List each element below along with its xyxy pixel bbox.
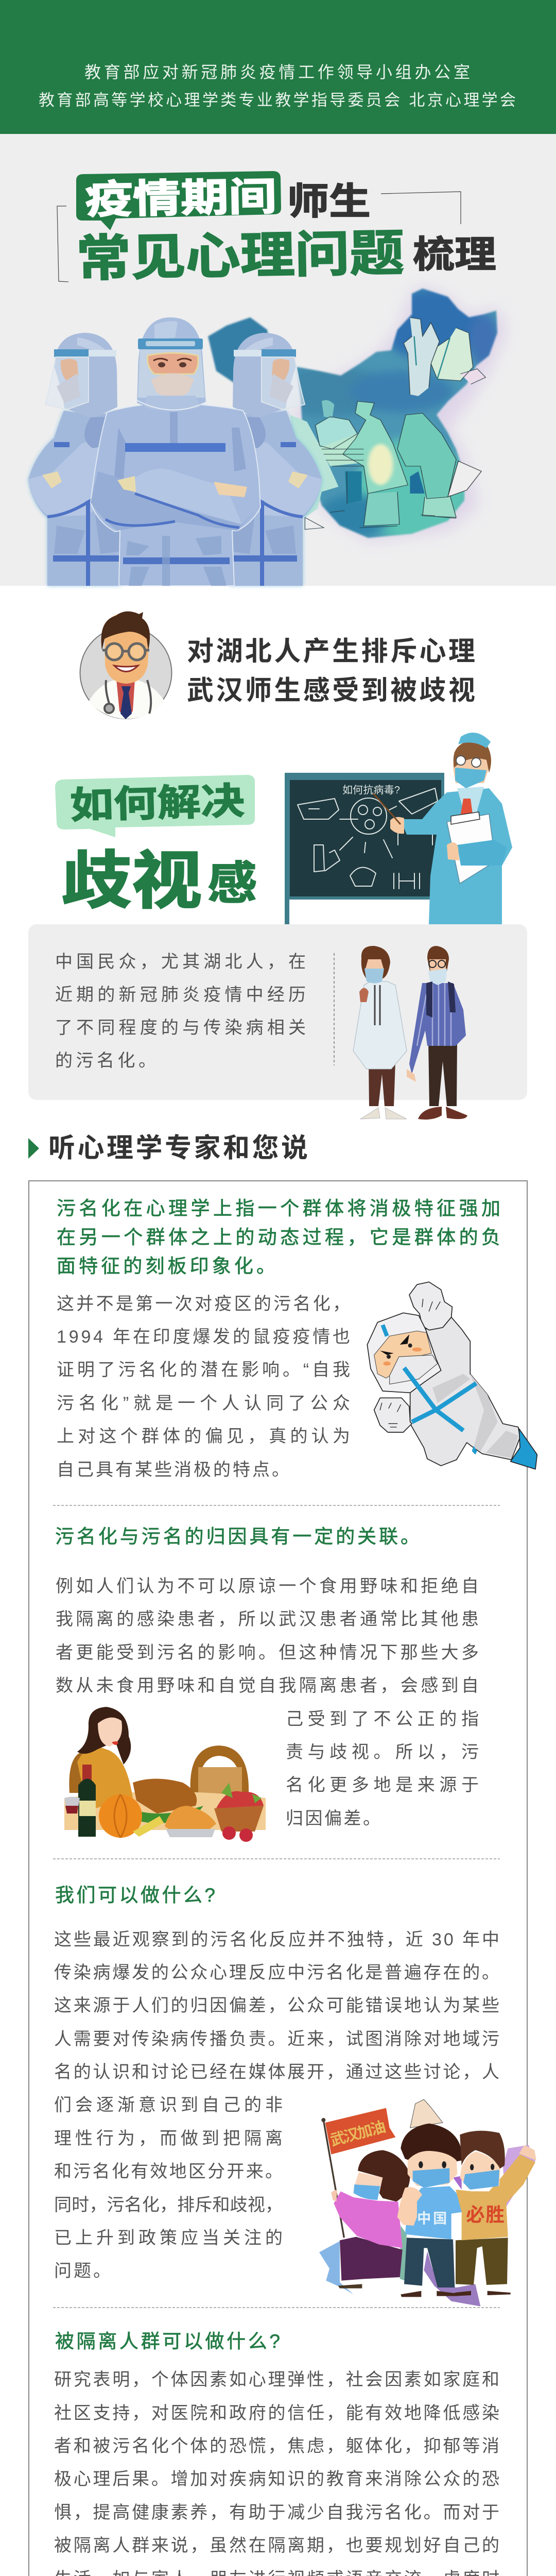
what can we do body: 们会逐渐意识到自己的非 xyxy=(54,2095,283,2115)
attribution body: 例如人们认为不可以原谅一个食用野味和拒绝自 xyxy=(56,1577,479,1596)
flying medic hero xyxy=(367,1282,537,1469)
intro text: 近期的新冠肺炎疫情中经历 xyxy=(55,985,306,1005)
attribution body: 归因偏差。 xyxy=(286,1809,380,1828)
quarantined people body: 极心理后果。增加对疾病知识的教育来消除公众的恐 xyxy=(54,2469,499,2489)
hero panel xyxy=(0,134,556,586)
attribution body xyxy=(56,1577,479,1828)
quarantined people body: 惧，提高健康素养，有助于减少自我污名化。而对于 xyxy=(54,2503,499,2522)
quarantined people body: 社区支持，对医院和政府的信任，能有效地降低感染 xyxy=(54,2403,499,2423)
flag slogan: 武汉加油 xyxy=(328,2118,388,2149)
intro text xyxy=(55,952,306,1071)
chalk drawings xyxy=(298,788,438,889)
what can we do body: 人需要对传染病传播负责。近来，试图消除对地域污 xyxy=(54,2029,499,2049)
icon: doctor avatar xyxy=(80,612,172,719)
what can we do body: 和污名化有效地区分开来。 xyxy=(54,2162,283,2181)
what can we do body: 已上升到政策应当关注的 xyxy=(54,2228,283,2248)
quarantined people body: 者和被污名化个体的恐慌，焦虑，躯体化，抑郁等消 xyxy=(54,2436,499,2456)
what can we do body xyxy=(54,1930,499,2281)
feeling text: 感 xyxy=(207,858,257,909)
dining table illustration xyxy=(64,1707,266,1842)
quarantined people body: 研究表明，个体因素如心理弹性，社会因素如家庭和 xyxy=(54,2370,499,2389)
medic center xyxy=(91,317,260,586)
attribution body: 我隔离的感染患者，所以武汉患者通常比其他患 xyxy=(56,1609,479,1629)
title xyxy=(57,171,496,286)
attribution body: 数从未食用野味和自觉自我隔离患者，会感到自 xyxy=(56,1676,479,1696)
attribution body: 者更能受到污名的影响。但这种情况下那些大多 xyxy=(56,1643,479,1663)
definition body: 上对这个群体的偏见，真的认为 xyxy=(57,1427,350,1446)
definition body: 污名化”就是一个人认同了公众 xyxy=(57,1394,350,1413)
attribution body: 名化更多地是来源于 xyxy=(286,1775,479,1795)
what can we do body: 传染病爆发的公众心理反应中污名化是普遍存在的。 xyxy=(54,1963,499,1982)
intro panel xyxy=(28,924,527,1120)
definition body: 自己具有某些消极的特点。 xyxy=(57,1460,289,1480)
definition heading: 面特征的刻板印象化。 xyxy=(57,1256,275,1277)
shoes xyxy=(360,1108,407,1119)
attribution heading: 污名化与污名的归因具有一定的关联。 xyxy=(55,1526,420,1547)
definition body: 证明了污名化的潜在影响。“自我 xyxy=(57,1360,350,1380)
headline line one: 对湖北人产生排斥心理 xyxy=(187,637,475,667)
issuing committees line: 教育部高等学校心理学类专业教学指导委员会 北京心理学会 xyxy=(39,91,516,109)
icon: arrow marker xyxy=(28,1138,39,1159)
title text teacher student: 师生 xyxy=(287,181,371,223)
quarantined people body: 被隔离人群来说，虽然在隔离期，也要规划好自己的 xyxy=(54,2536,499,2555)
definition heading: 污名化在心理学上指一个群体将消极特征强加 xyxy=(57,1198,500,1219)
attribution body: 责与歧视。所以，污 xyxy=(286,1742,479,1762)
title text top: 疫情期间 xyxy=(84,175,277,222)
quarantined people heading: 被隔离人群可以做什么? xyxy=(55,2331,280,2352)
medic side right xyxy=(229,333,322,586)
definition heading: 在另一个群体之上的动态过程，它是群体的负 xyxy=(57,1227,500,1248)
title bubble xyxy=(76,171,281,230)
medic and student xyxy=(353,946,467,1120)
china map watercolor xyxy=(208,278,515,546)
three masked children with flag xyxy=(319,2099,536,2307)
how to solve bubble xyxy=(55,775,255,837)
discrimination big text: 歧视 xyxy=(62,846,202,916)
blackboard xyxy=(285,773,444,925)
what can we do body: 名的认识和讨论已经在媒体展开，通过这些讨论，人 xyxy=(54,2062,499,2082)
chalk caption: 如何抗病毒? xyxy=(342,784,400,796)
definition heading xyxy=(57,1198,500,1277)
section heading xyxy=(28,1133,308,1163)
definition body: 这并不是第一次对疫区的污名化， xyxy=(57,1294,350,1314)
definition body xyxy=(57,1294,350,1480)
content box xyxy=(29,1181,542,2576)
what can we do body: 这来源于人们的归因偏差，公众可能错误地认为某些 xyxy=(54,1996,499,2015)
attribution body: 己受到了不公正的指 xyxy=(286,1709,479,1729)
medic side left xyxy=(28,333,121,586)
header band xyxy=(0,0,556,134)
title text main: 常见心理问题 xyxy=(76,226,405,286)
intro text: 中国民众，尤其湖北人，在 xyxy=(55,952,306,972)
discrimination title xyxy=(62,846,257,916)
issuing office line: 教育部应对新冠肺炎疫情工作领导小组办公室 xyxy=(84,63,470,81)
sketched medics on map xyxy=(290,317,485,530)
intro text: 了不同程度的与传染病相关 xyxy=(55,1018,306,1038)
heading text: 听心理学专家和您说 xyxy=(48,1133,308,1163)
what can we do heading: 我们可以做什么? xyxy=(55,1885,215,1906)
what can we do body: 理性行为，而做到把隔离 xyxy=(54,2129,283,2148)
nurse presenter xyxy=(373,733,512,924)
three masked children with flag: 中国 xyxy=(417,2210,447,2226)
intro text: 的污名化。 xyxy=(55,1051,156,1071)
quarantined people body xyxy=(54,2370,499,2576)
what can we do body: 这些最近观察到的污名化反应并不独特，近 30 年中 xyxy=(54,1930,499,1950)
what can we do body: 问题。 xyxy=(54,2261,111,2281)
title text sort out: 梳理 xyxy=(413,234,496,276)
how to solve text: 如何解决 xyxy=(70,781,245,826)
definition body: 1994 年在印度爆发的鼠疫疫情也 xyxy=(57,1327,350,1347)
three masked children with flag: 必胜 xyxy=(466,2205,505,2226)
headline line two: 武汉师生感受到被歧视 xyxy=(187,676,475,706)
what can we do body: 同时，污名化，排斥和歧视， xyxy=(54,2195,283,2215)
headline: exclusion and discrimination xyxy=(187,637,475,706)
